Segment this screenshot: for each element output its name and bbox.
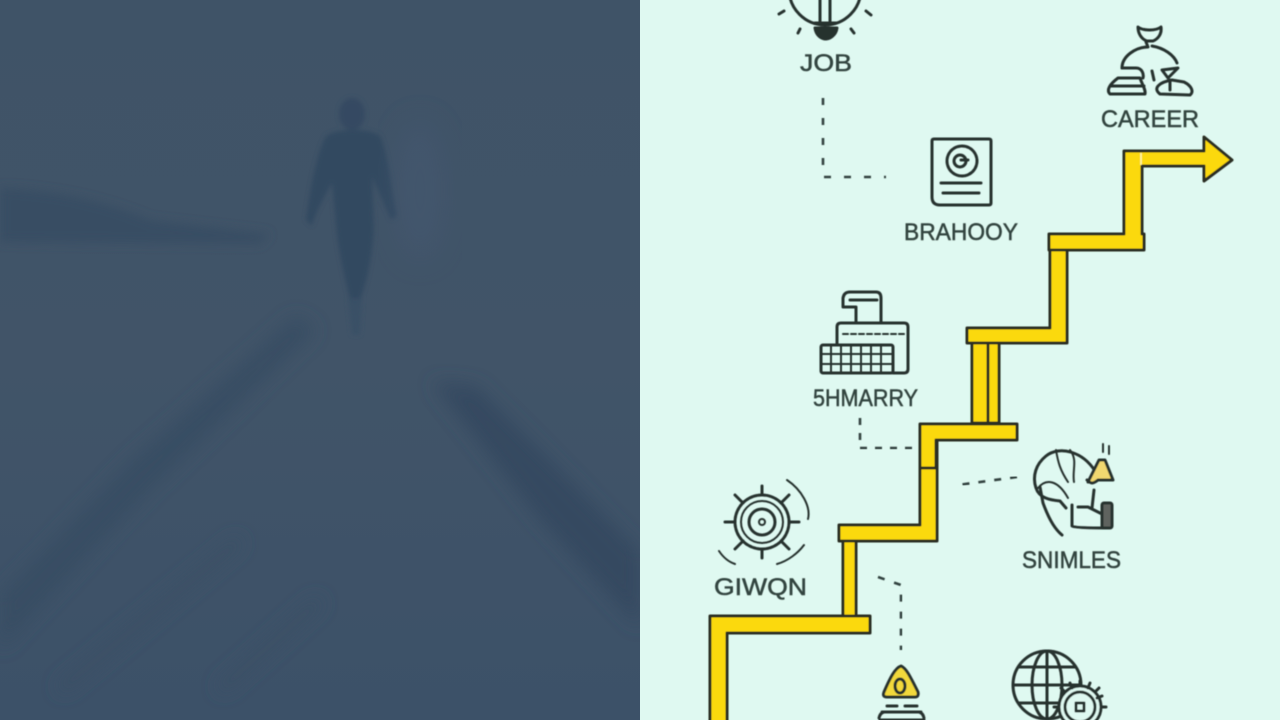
panel: misty road with walking figure (0, 0, 640, 720)
connector: skills to stairs (958, 477, 1017, 485)
icon: globe with gear (1013, 651, 1106, 720)
icon: warning lamp (879, 666, 924, 720)
staircase arrow (710, 137, 1232, 720)
icon: gear with arcs (719, 480, 809, 564)
label: BRAHOOY: BRAHOOY (904, 219, 1018, 246)
faint road markings (60, 540, 320, 690)
icon: light bulb (779, 0, 871, 39)
label: SNIMLES: SNIMLES (1022, 547, 1121, 574)
label: CAREER: CAREER (1101, 106, 1199, 133)
icon: head with bell (1034, 444, 1113, 535)
label: GIWQN: GIWQN (714, 574, 807, 601)
icon: certificate (932, 139, 991, 205)
right road edge (432, 382, 640, 628)
left road edge (0, 316, 316, 650)
distant dark horizon (0, 188, 270, 244)
icon: cash register (821, 292, 908, 373)
panel: career staircase background (640, 0, 1280, 720)
label: SHMARRY: 5HMARRY (813, 385, 918, 412)
connector: summary to stairs (860, 418, 918, 448)
silhouette: walking person (306, 98, 397, 335)
label: JOB: JOB (800, 50, 852, 77)
connector: job to certificate (823, 98, 886, 177)
soft light haze beside figure (394, 120, 446, 260)
icon: money bag and shoes (1108, 27, 1192, 95)
connector: gain to lamp (878, 577, 901, 650)
